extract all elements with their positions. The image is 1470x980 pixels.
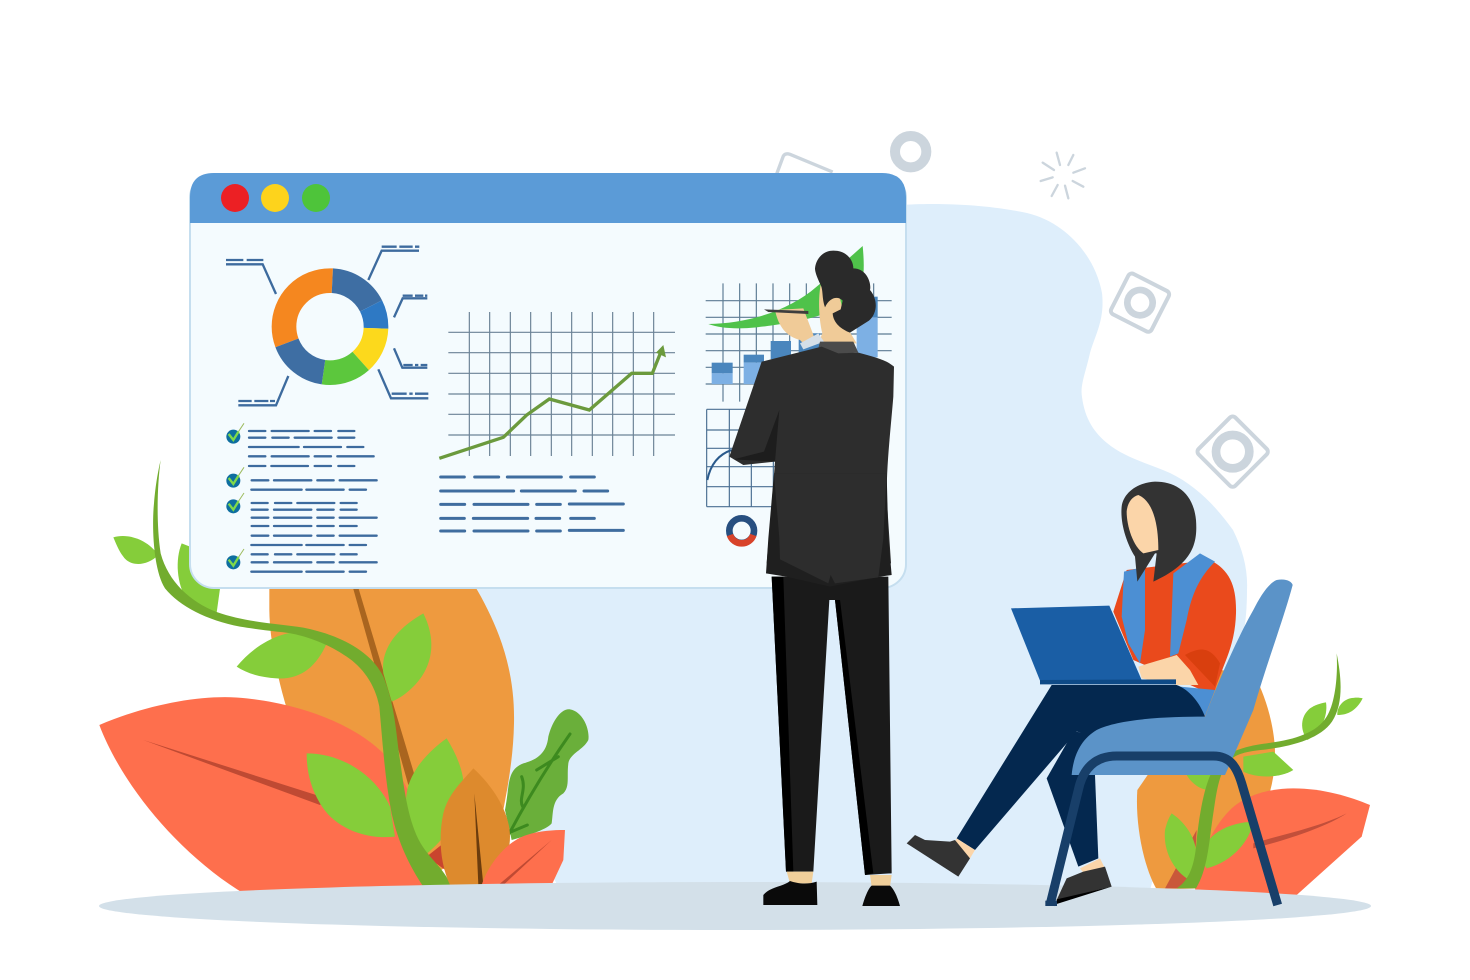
man's lower body — [763, 473, 900, 906]
leaf one — [113, 536, 158, 564]
pen — [764, 309, 808, 314]
leaf hidden — [1187, 775, 1220, 790]
left foliage behind window — [99, 543, 514, 893]
small orange leaf vein — [474, 793, 483, 885]
leaf behind window — [178, 543, 222, 613]
background blob — [400, 204, 1247, 890]
donut leader lines — [226, 247, 428, 405]
diamond ring small — [1110, 272, 1170, 333]
ankles — [787, 872, 892, 887]
chair frame — [1050, 756, 1278, 905]
sparkle — [1041, 153, 1085, 198]
laptop base — [1040, 679, 1176, 684]
vest left — [1122, 567, 1145, 663]
growth arrowhead — [656, 345, 666, 357]
window body — [190, 174, 906, 588]
rounded frame behind window — [777, 154, 833, 174]
small red leaf — [482, 830, 565, 885]
back foot — [1080, 858, 1105, 875]
leaf lower left — [1165, 813, 1197, 878]
vine left — [153, 460, 451, 887]
small donut — [729, 518, 754, 543]
small red leaf vein — [498, 840, 552, 885]
jacket hem — [766, 473, 892, 587]
checklist text lines — [249, 431, 377, 572]
title bar — [190, 173, 906, 223]
chair foot — [1045, 901, 1057, 906]
red leaf right — [1195, 788, 1370, 895]
growth line — [439, 350, 662, 458]
chart grid — [448, 312, 675, 456]
wavy leaf — [505, 709, 589, 840]
decorative shapes top right — [777, 136, 1269, 488]
torso — [1113, 560, 1236, 692]
hair — [1121, 482, 1196, 582]
back shoe — [1057, 867, 1112, 900]
trouser shading — [772, 577, 873, 875]
front leg — [957, 685, 1205, 850]
hand — [1138, 655, 1198, 685]
front shoe — [907, 835, 970, 877]
lower curve — [707, 450, 732, 480]
back leg — [1047, 732, 1098, 867]
check icons — [226, 423, 244, 569]
small orange leaf — [441, 768, 510, 885]
sleeve fold — [1185, 650, 1220, 687]
back shoe sole — [1057, 887, 1112, 904]
shoes — [763, 881, 900, 906]
right foliage behind chair — [1137, 653, 1370, 895]
leaf five — [406, 738, 464, 857]
jacket back panel — [774, 473, 887, 583]
arm shading — [733, 410, 779, 462]
dark gap — [427, 843, 450, 873]
vine right — [1177, 653, 1341, 888]
leaf three — [383, 613, 431, 702]
trousers — [772, 577, 892, 875]
red leaf vein — [143, 740, 327, 805]
browser window — [190, 173, 906, 588]
hand — [775, 308, 814, 343]
donut panel with legends and checklist — [226, 247, 428, 572]
orange vein right — [1165, 830, 1197, 888]
donut chart — [284, 281, 376, 373]
collar — [818, 342, 858, 354]
green trend arrow — [708, 246, 864, 328]
orange leaf vein — [353, 587, 415, 785]
man hair — [815, 251, 876, 333]
leaf four — [307, 753, 395, 837]
leaf top one — [1302, 702, 1326, 740]
bar chart grid — [706, 283, 892, 402]
left foliage front — [113, 460, 589, 887]
orange leaf — [269, 583, 514, 883]
laptop screen — [1011, 606, 1142, 681]
shirt cuff — [800, 333, 824, 349]
orange leaf right — [1137, 670, 1275, 889]
red leaf — [99, 697, 437, 893]
leaf lower right — [1200, 822, 1253, 868]
ring — [895, 136, 926, 167]
chart caption lines — [441, 477, 623, 531]
lower grid — [707, 409, 780, 507]
front foot — [952, 838, 975, 858]
leaf top two — [1337, 698, 1363, 715]
right charts panel and man's upper body — [706, 246, 894, 563]
seated woman with laptop and chair — [907, 482, 1293, 906]
bars — [712, 297, 878, 384]
chair shell — [1072, 580, 1293, 775]
ground shadow — [99, 882, 1371, 930]
diamond ring large — [1196, 415, 1269, 488]
face — [1127, 495, 1158, 553]
leaf mid right — [1243, 752, 1293, 776]
window control dots — [221, 184, 330, 212]
red leaf right vein — [1253, 813, 1347, 848]
line chart panel — [439, 312, 675, 531]
vest hem — [1180, 687, 1215, 716]
vest right — [1170, 553, 1215, 657]
jacket — [729, 347, 894, 563]
man neck and face — [818, 285, 857, 343]
leaf two — [237, 632, 327, 678]
